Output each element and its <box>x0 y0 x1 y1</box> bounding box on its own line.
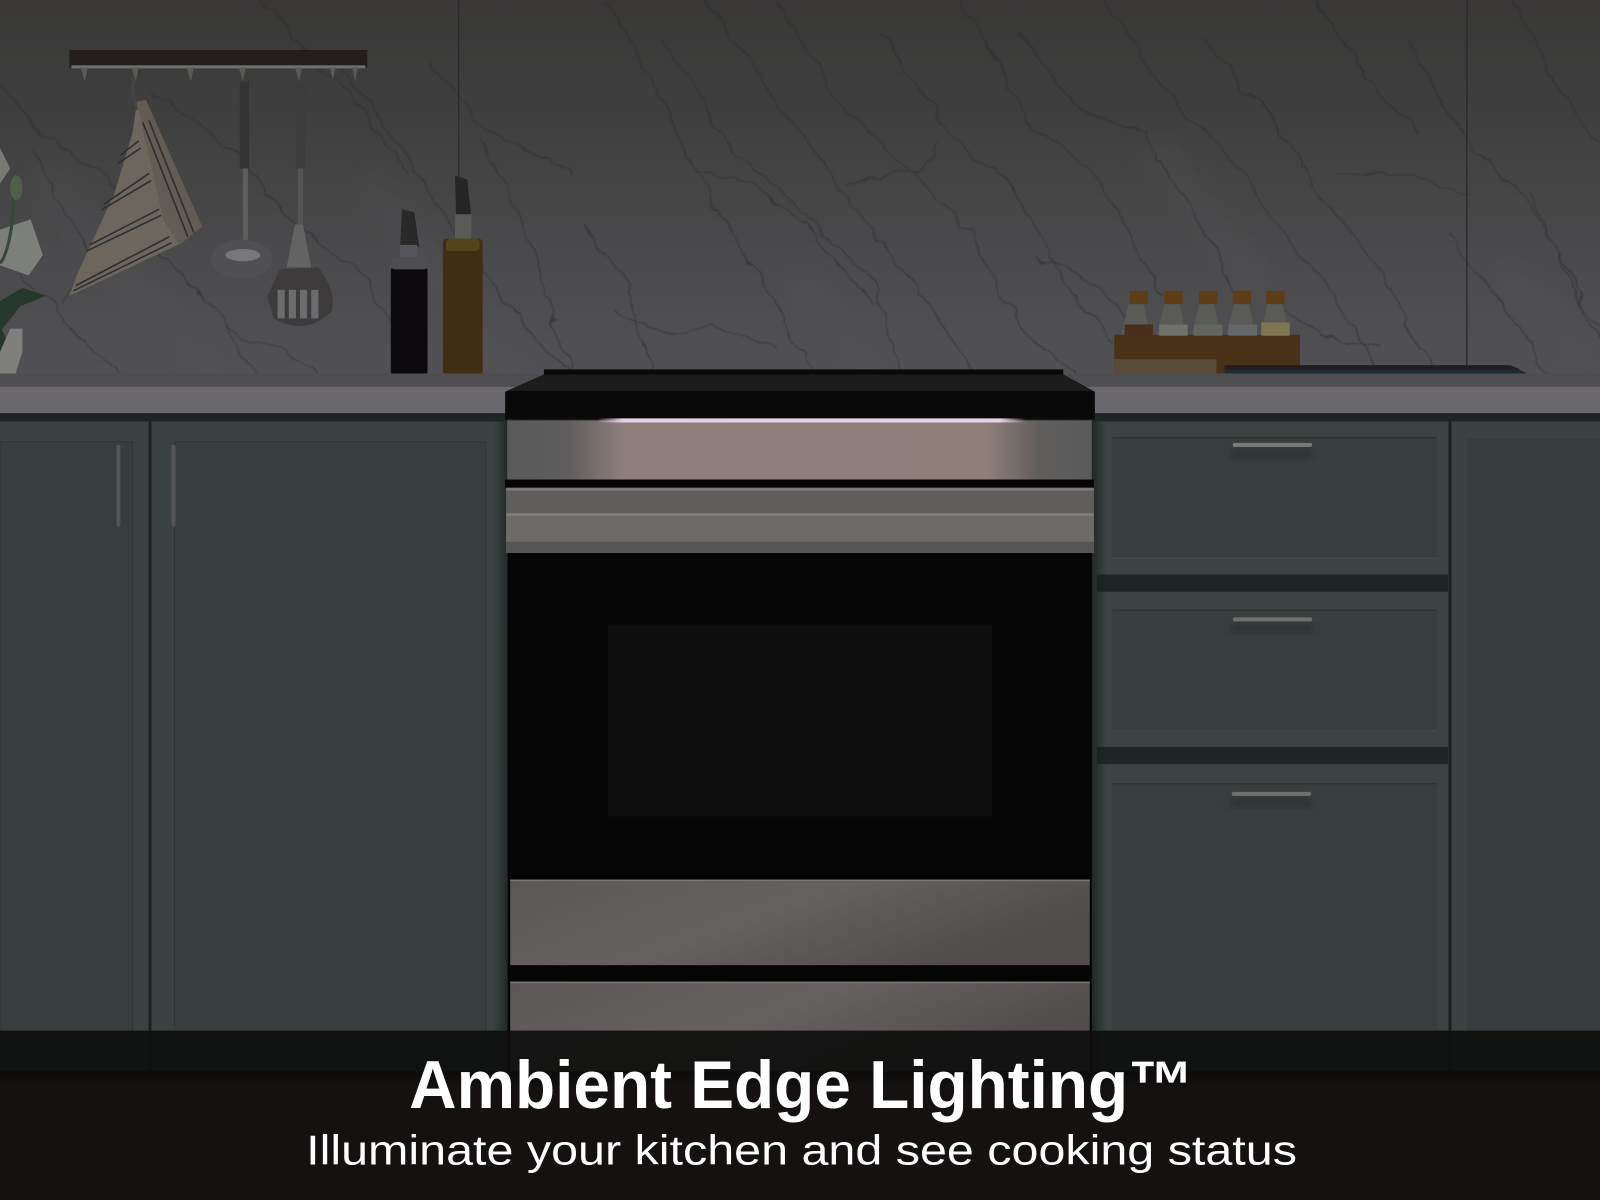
stainless lower panel <box>510 880 1090 965</box>
cooktop <box>505 369 1095 419</box>
middle drawer <box>1097 592 1449 747</box>
ladle <box>211 82 272 279</box>
cutting board tray <box>1212 365 1526 385</box>
black gap <box>505 480 1094 488</box>
left lower cabinets <box>0 421 508 1074</box>
caption band <box>0 1031 1600 1200</box>
olive oil bottle <box>443 176 483 376</box>
lit control panel <box>507 420 1092 480</box>
tea towel <box>69 77 202 296</box>
title: Ambient Edge Lighting™ <box>409 1048 1194 1123</box>
bottom drawer <box>1097 764 1449 1074</box>
oven window <box>608 624 992 816</box>
bottles <box>391 176 483 376</box>
oven door <box>508 553 1092 880</box>
hanging cord left <box>458 0 460 179</box>
ambient edge light strip <box>597 418 1026 422</box>
cabinet door far right <box>1450 421 1600 1074</box>
dark vinegar bottle <box>391 209 428 374</box>
flowers and vase <box>0 148 46 378</box>
floor <box>0 1071 1600 1200</box>
hook rail with utensils <box>69 50 367 326</box>
cabinet door left <box>150 421 508 1074</box>
black gap <box>508 965 1092 982</box>
oven door handle <box>506 488 1094 553</box>
wall: marble backsplash <box>0 0 1600 388</box>
spice rack on counter <box>1114 291 1300 373</box>
drawer shadow gap <box>1097 574 1448 592</box>
pendant cord right <box>1466 0 1468 367</box>
slotted turner <box>267 82 333 326</box>
subtitle: Illuminate your kitchen and see cooking status <box>306 1126 1297 1173</box>
top drawer <box>1097 421 1449 574</box>
range oven <box>505 369 1095 1074</box>
countertop <box>0 373 1600 421</box>
right lower cabinets <box>1092 421 1600 1074</box>
storage drawer <box>510 982 1090 1074</box>
cabinet door far left <box>0 421 155 1074</box>
drawer shadow gap <box>1097 747 1448 764</box>
